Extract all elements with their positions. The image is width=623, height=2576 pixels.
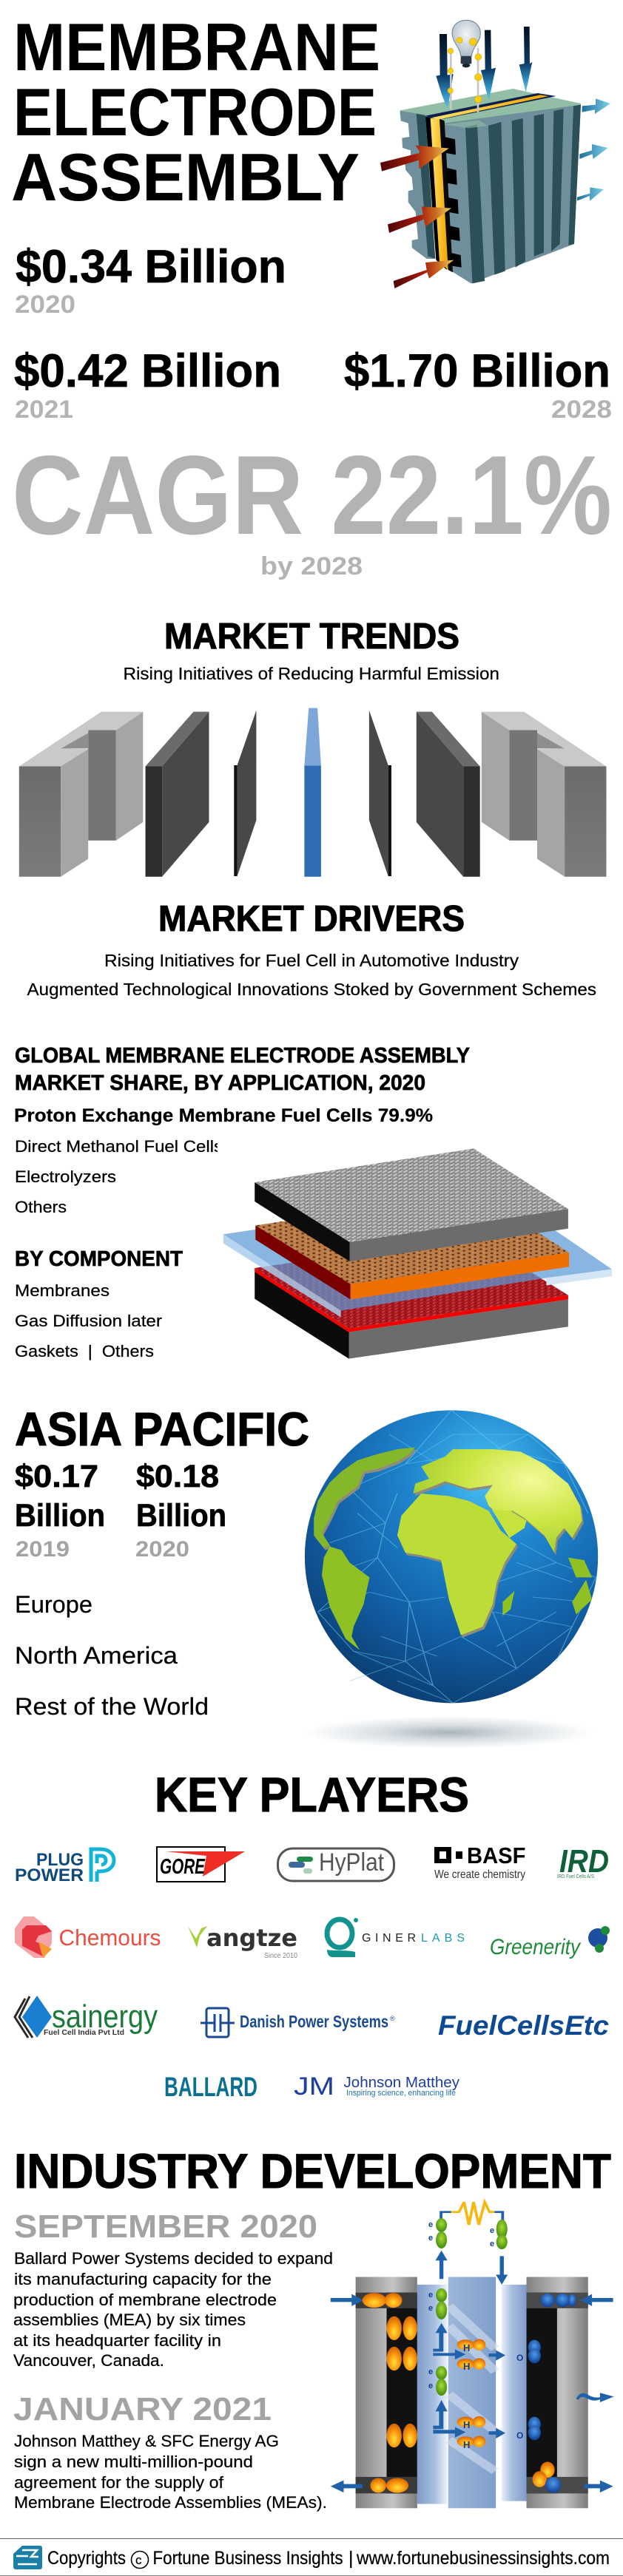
stat: 2020 market size: $0.34 Billion — [16, 241, 286, 293]
land: Eurasia — [413, 1449, 582, 1553]
labels: particle letters: e — [428, 2304, 433, 2313]
list: applications: Electrolyzers — [15, 1167, 116, 1186]
heading: market drivers: MARKET DRIVERS — [158, 899, 465, 939]
list: applications: Others — [15, 1198, 67, 1216]
text: September 2020 event: production of membrane electrode — [13, 2291, 277, 2309]
title: ELECTRODE — [13, 75, 377, 150]
stat: Asia Pacific 2020 — [135, 1459, 226, 1562]
subheading: January 2021: JANUARY 2021 — [13, 2391, 272, 2427]
logo: BASF: We create chemistry — [434, 1868, 525, 1881]
logo: Yangtze: Since 2010 — [264, 1952, 297, 1960]
logo: Gore: GORE — [160, 1855, 206, 1879]
list: applications — [15, 1137, 223, 1216]
logo: Yangtze — [188, 1924, 297, 1960]
stat: Asia Pacific 2020: Billion — [136, 1498, 226, 1533]
title: MEMBRANE — [13, 10, 380, 85]
logo: Giner Labs: LABS — [421, 1932, 465, 1945]
particles: electrons (green) — [436, 2218, 508, 2396]
text: September 2020 event: its manufacturing capacity for the — [14, 2270, 272, 2288]
labels: particle letters: H — [463, 2439, 470, 2450]
panel: market trends — [19, 617, 606, 877]
logo: BASF — [434, 1843, 525, 1881]
stat: Asia Pacific 2020: 2020 — [135, 1537, 189, 1562]
logo: Sainergy: Fuel Cell India Pvt Ltd — [44, 2029, 124, 2037]
stat: 2028 market size: $1.70 Billion — [344, 345, 610, 397]
list: other regions: Rest of the World — [15, 1693, 209, 1720]
panel: regional share — [15, 1403, 598, 1749]
logo: Sainergy — [15, 1996, 158, 2038]
illustration: membrane layers — [223, 1148, 612, 1359]
illustration: fuel cell diagram — [331, 2202, 614, 2508]
arrows: outflow (light blue) — [577, 98, 610, 201]
text: copyright: c — [135, 2553, 142, 2567]
logo: Johnson Matthey: JM — [294, 2072, 334, 2101]
logo: IRD: IRD Fuel Cells A/S — [557, 1873, 594, 1880]
logo: Johnson Matthey: Johnson Matthey — [343, 2075, 459, 2091]
particles: oxygen (blue) — [528, 2294, 576, 2493]
text: January 2021 event: Membrane Electrode Assemblies (MEAs). — [14, 2493, 327, 2512]
logo: HyPlat: HyPlat — [319, 1848, 384, 1877]
logo: Danish Power Systems: ® — [390, 2015, 395, 2022]
arrows: flow directions — [331, 2251, 614, 2492]
stat: 2021 market size — [14, 345, 281, 424]
stat: 2028 market size — [344, 345, 612, 424]
logo: Plug Power — [15, 1849, 114, 1885]
list: other regions: North America — [15, 1642, 178, 1669]
list: applications: Direct Methanol Fuel Cells — [15, 1137, 223, 1156]
heading: by component: BY COMPONENT — [15, 1247, 183, 1271]
list: components: Gaskets | Others — [15, 1342, 154, 1360]
panel: header and market size — [11, 10, 612, 580]
particles: fuel (orange) — [363, 2293, 555, 2493]
text: driver 2: Augmented Technological Innovations Stoked by Government Schemes — [27, 980, 596, 999]
land: North America — [314, 1447, 415, 1548]
land: South America — [322, 1547, 369, 1650]
stat: 2021 market size: $0.42 Billion — [14, 345, 281, 397]
text: January 2021 event: agreement for the supply of — [14, 2473, 224, 2492]
title — [11, 10, 380, 215]
arrows: fuel in (blue) — [436, 27, 532, 109]
logo: Johnson Matthey — [294, 2072, 459, 2101]
labels: particle letters: e — [428, 2220, 433, 2229]
labels: particle letters: e — [428, 2382, 433, 2390]
logo: Johnson Matthey: Inspiring science, enhancing life — [346, 2089, 456, 2098]
land: Africa — [397, 1494, 516, 1636]
heading: global market share: MARKET SHARE, BY APPLICATION, 2020 — [15, 1071, 425, 1095]
stat: 2021 market size: 2021 — [15, 396, 73, 424]
labels: particle letters: H — [463, 2342, 470, 2353]
panel: key players — [15, 1767, 610, 2102]
labels: particle letters: e — [428, 2367, 433, 2376]
logo: Yangtze: angtze — [206, 1924, 297, 1952]
logo: Plug Power: PLUG — [36, 1850, 84, 1870]
labels: particle letters — [428, 2220, 523, 2450]
logo: Danish Power Systems: Danish Power Systems — [240, 2012, 388, 2031]
panel: industry development — [13, 2143, 614, 2512]
logo: Greenerity — [490, 1926, 610, 1959]
logo: BASF: BASF — [467, 1843, 525, 1868]
text: driver 1: Rising Initiatives for Fuel Cell in Automotive Industry — [104, 951, 519, 970]
text: September 2020 event — [13, 2249, 333, 2370]
title: ASSEMBLY — [11, 140, 360, 215]
text: trend: Rising Initiatives of Reducing Harmful Emission — [123, 664, 499, 683]
panel: market drivers — [27, 899, 596, 999]
list: other regions — [15, 1591, 209, 1720]
arrows: air in (red) — [380, 146, 454, 288]
stat: 2020 market size — [15, 241, 286, 319]
labels: particle letters: e — [428, 2234, 433, 2243]
subheading: September 2020: SEPTEMBER 2020 — [14, 2209, 317, 2245]
illustration: globe — [305, 1410, 598, 1749]
labels: particle letters: e — [428, 2291, 433, 2299]
stat: Asia Pacific 2020: $0.18 — [136, 1459, 219, 1494]
logo: Chemours: Chemours — [59, 1925, 161, 1950]
heading: global market share — [15, 1044, 470, 1095]
labels: particle letters: e — [490, 2226, 494, 2235]
footer — [0, 2538, 623, 2576]
stat: CAGR: by 2028 — [260, 552, 363, 580]
logo: Gore — [157, 1847, 245, 1882]
list: other regions: Europe — [15, 1591, 92, 1618]
list: components: Membranes — [15, 1281, 110, 1300]
logo: Plug Power: POWER — [15, 1865, 84, 1885]
text: copyright — [47, 2548, 610, 2569]
stat: Asia Pacific 2019: 2019 — [16, 1537, 70, 1562]
text: January 2021 event: sign a new multi-million-pound — [14, 2453, 253, 2471]
logo: FuelCellsEtc: FuelCellsEtc — [438, 2010, 609, 2041]
logo: Sainergy: sainergy — [52, 1999, 158, 2035]
heading: market trends: MARKET TRENDS — [164, 617, 459, 657]
land: islands and Australia — [502, 1558, 592, 1616]
text: September 2020 event: Vancouver, Canada. — [13, 2351, 164, 2370]
logo: IRD: IRD — [559, 1843, 609, 1880]
text: copyright: Copyrights — [47, 2548, 126, 2569]
labels: particle letters: O — [516, 2430, 523, 2441]
labels: particle letters: O — [516, 2353, 523, 2363]
illustration: exploded fuel cell plates — [19, 708, 606, 877]
stat: 2028 market size: 2028 — [551, 396, 612, 424]
logo: HyPlat — [278, 1848, 394, 1881]
text: September 2020 event: Ballard Power Systems decided to expand — [14, 2249, 333, 2268]
labels: particle letters: H — [463, 2419, 470, 2430]
labels: particle letters: e — [490, 2240, 494, 2248]
list: components: Gas Diffusion later — [15, 1312, 162, 1330]
logo: Danish Power Systems — [201, 2008, 395, 2037]
labels: particle letters: H — [463, 2361, 470, 2372]
stat: Asia Pacific 2019 — [15, 1459, 105, 1562]
stat: Asia Pacific 2019: Billion — [15, 1498, 105, 1533]
text: copyright: | — [348, 2548, 354, 2569]
icon: light bulb with wires — [448, 20, 482, 112]
text: leading application: Proton Exchange Membrane Fuel Cells 79.9% — [14, 1105, 433, 1126]
text: January 2021 event: Johnson Matthey & SFC Energy AG — [14, 2432, 279, 2450]
text: September 2020 event: assemblies (MEA) by six times — [13, 2311, 246, 2329]
text: copyright: Fortune Business Insights — [152, 2548, 343, 2569]
logo: Greenerity: Greenerity — [490, 1935, 582, 1959]
heading: global market share: GLOBAL MEMBRANE ELECTRODE ASSEMBLY — [15, 1044, 470, 1068]
logo: Ballard: BALLARD — [164, 2072, 257, 2102]
heading: Asia Pacific: ASIA PACIFIC — [15, 1403, 309, 1456]
text: September 2020 event: at its headquarter facility in — [13, 2331, 221, 2350]
logo: Giner Labs: GINER — [362, 1932, 416, 1945]
illustration: fuel cell stack — [380, 20, 610, 288]
list: components — [15, 1281, 162, 1360]
logo: Fortune Business Insights — [13, 2546, 42, 2569]
land: Arabia — [492, 1510, 527, 1538]
stat: 2020 market size: 2020 — [15, 291, 75, 319]
heading: key players: KEY PLAYERS — [155, 1767, 469, 1822]
logo: Giner Labs — [327, 1918, 465, 1957]
wire with resistor — [441, 2202, 502, 2225]
stat: Asia Pacific 2019: $0.17 — [15, 1459, 98, 1494]
panel: market share — [14, 1044, 612, 1360]
logo: Chemours — [15, 1916, 161, 1958]
text: January 2021 event — [14, 2432, 327, 2512]
